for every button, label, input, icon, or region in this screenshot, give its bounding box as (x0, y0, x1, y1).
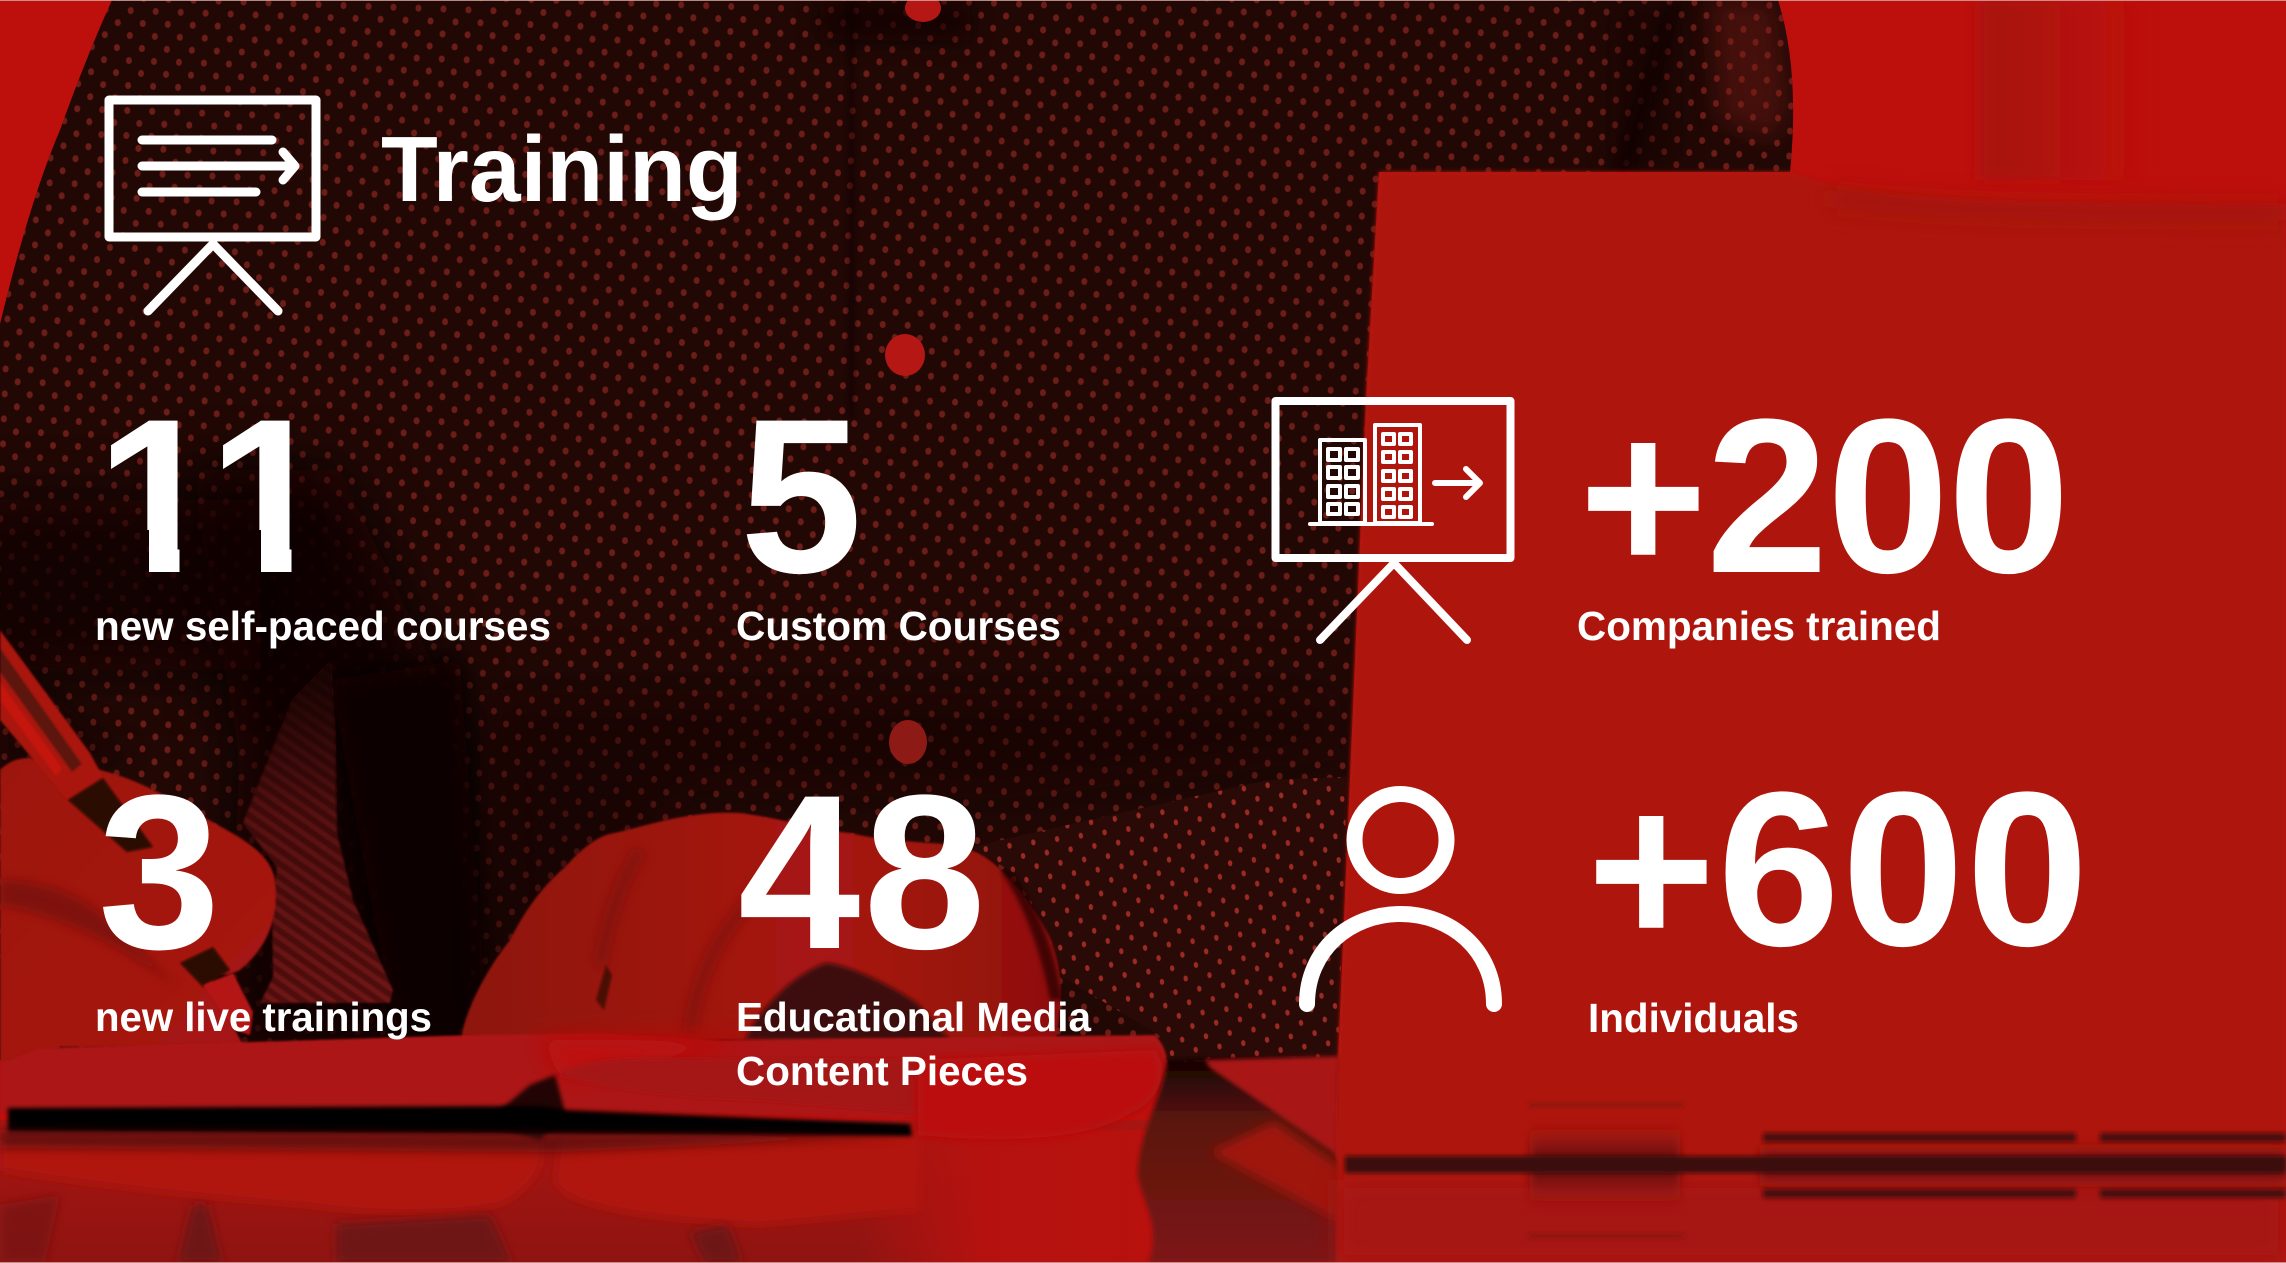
notebook right bulge (918, 1050, 1162, 1139)
stat: self-paced courses (95, 373, 551, 649)
shoulder highlight (1710, 0, 1790, 140)
number: 5 (740, 373, 862, 619)
reflection shadows (0, 1195, 742, 1263)
shirt buttons (885, 0, 941, 764)
label: Companies trained (1577, 603, 1941, 649)
number: +600 (1587, 746, 2091, 992)
right reflection glow (860, 1130, 1170, 1263)
label: Individuals (1588, 995, 1799, 1041)
shirt cuff (243, 663, 393, 1003)
stat: companies trained (1276, 373, 2069, 649)
hinge glow bands (1530, 1118, 2286, 1212)
number: 3 (98, 749, 220, 995)
pen grip dark (68, 778, 230, 987)
hand shadow (0, 880, 180, 990)
stat: live trainings (95, 749, 432, 1040)
shirt (0, 0, 1800, 1060)
icon: presentation board with lines and arrow (109, 100, 316, 311)
table surface reflection (0, 1120, 1170, 1263)
laptop lower shading (1336, 1180, 2286, 1263)
label: new live trainings (95, 994, 432, 1040)
title: Training (381, 117, 743, 221)
laptop body (1336, 172, 2286, 1263)
notebook dark edge (0, 1075, 915, 1152)
number: 48 (738, 749, 989, 995)
shirt fabric (0, 0, 1800, 1060)
right hand (462, 813, 1062, 1040)
keyboard lines (1528, 1103, 2286, 1238)
cuff shading (243, 663, 393, 1003)
notebook lower page (558, 1058, 915, 1112)
left hand (0, 758, 276, 1063)
right sleeve (971, 777, 1347, 1072)
laptop top shading (1830, 198, 2286, 212)
label line 2: Content Pieces (736, 1048, 1028, 1094)
shoulder fold (1612, 0, 1680, 172)
stat: educational media (736, 749, 1091, 1094)
icon: person (1307, 794, 1494, 1004)
pen barrel (0, 630, 103, 800)
laptop hinge line (1345, 1156, 2286, 1173)
header (109, 100, 743, 311)
reflection blobs (0, 1130, 920, 1225)
table gap under sleeve (1138, 1058, 1340, 1263)
label: Custom Courses (736, 603, 1061, 649)
laptop base reflection (1210, 1122, 1340, 1222)
number: 11 (96, 373, 330, 619)
shadows on shirt (0, 0, 1680, 1060)
pen tip (203, 973, 253, 1035)
shirt dots (0, 0, 1800, 1060)
blurred backdrop stripe (1970, 0, 2160, 180)
stat: individuals (1307, 746, 2091, 1041)
stat: custom courses (736, 373, 1061, 649)
laptop base (1205, 1056, 1340, 1165)
label: new self-paced courses (95, 603, 551, 649)
label line 1: Educational Media (736, 994, 1091, 1040)
icon: board with buildings (1276, 401, 1510, 640)
notebook (0, 1033, 1167, 1139)
number: +200 (1579, 373, 2069, 619)
